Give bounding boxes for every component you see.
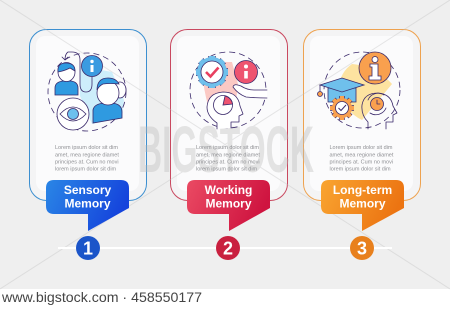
icon: long-term memory [318,52,400,129]
step 2: 2 [223,238,233,258]
icon: eye [57,98,89,130]
panel: working memory card [170,30,288,200]
text block: long-term memory description: amet, mea regione diamet [330,152,394,158]
icon: working memory [190,52,267,129]
icon: info badge [82,56,102,76]
icon: info badge [234,60,258,84]
label: sensory memory [46,180,129,231]
label: long-term memory [321,180,404,231]
label: sensory memory: Sensory [64,183,112,197]
label: long-term memory: Memory [339,196,386,210]
text block: sensory memory description: amet, mea regione diamet [55,152,119,158]
icon: head with pie clock [207,92,243,129]
text block: working memory description: amet, mea regione diamet [196,152,260,158]
text block: sensory memory description [55,145,119,172]
icon: info badge [359,52,391,84]
icon: person right [93,78,126,123]
step 2 [216,236,240,260]
text block: long-term memory description: Lorem ipsum dolor sit dim [330,145,393,151]
text block: sensory memory description: lorem ipsum dolor sit dim [55,166,117,172]
panel: long-term memory card [304,30,420,200]
step 3 [350,236,374,260]
icon: gear with check [330,96,354,120]
icon: gear with check [196,56,228,88]
timeline line [58,247,392,249]
step 3: 3 [357,238,367,258]
text block: sensory memory description: Lorem ipsum dolor sit dim [55,145,118,151]
text block: working memory description: Lorem ipsum dolor sit dim [196,145,259,151]
text block: working memory description: lorem ipsum dolor sit dim [196,166,258,172]
label: long-term memory: Long-term [333,183,392,197]
step 1 [76,236,100,260]
panel: sensory memory card [30,30,146,200]
text block: long-term memory description: lorem ipsum dolor sit dim [330,166,391,172]
icon: graduation cap [318,78,364,102]
icon: person left [55,62,78,95]
icon: head with clock [362,93,397,129]
icon: open hand [233,85,267,98]
icon: sensory memory [48,52,126,131]
label: working memory: Memory [205,196,252,210]
text block: long-term memory description: principes at. Cum no movi [330,160,393,166]
footer caption: www.bigstock.com · 458550177 [1,289,202,305]
text block: sensory memory description: principes at. Cum no movi [55,160,119,166]
step 1: 1 [83,238,93,258]
text block: working memory description [196,145,260,172]
label: sensory memory: Memory [64,196,111,210]
text block: long-term memory description [330,145,394,172]
text block: working memory description: principes at. Cum no movi [196,160,260,166]
label: working memory [187,180,270,231]
label: working memory: Working [205,183,252,197]
